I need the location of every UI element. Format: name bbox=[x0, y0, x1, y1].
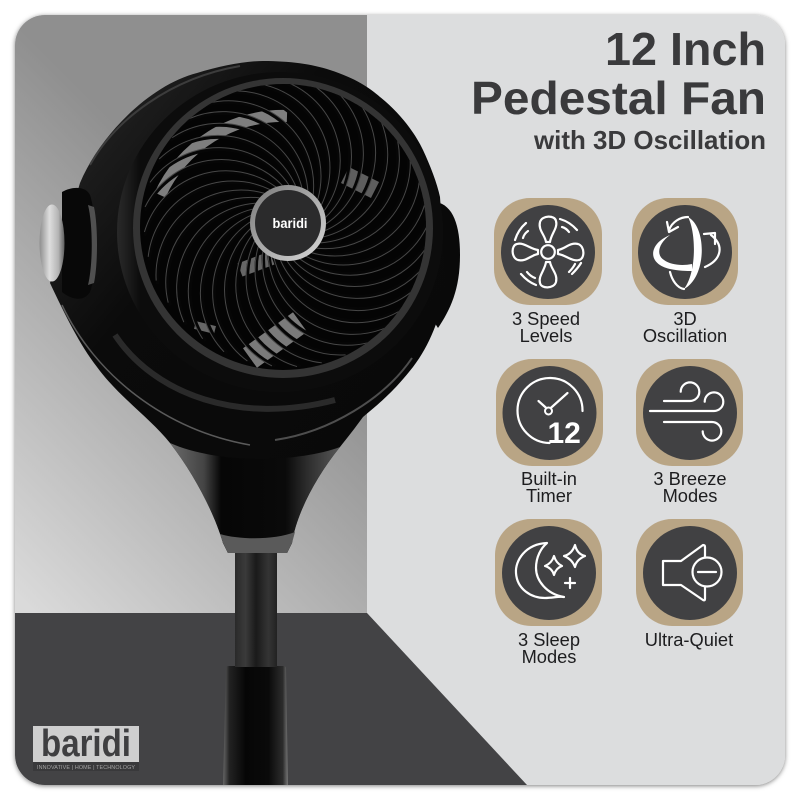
blade glimpses bbox=[160, 116, 375, 358]
fan lower pole bbox=[223, 666, 288, 785]
logo tagline bbox=[33, 762, 139, 771]
badge bbox=[495, 519, 602, 626]
icon: moon and stars bbox=[516, 543, 585, 598]
label: Built-in bbox=[521, 468, 577, 489]
grille spokes highlight bbox=[144, 84, 426, 367]
fan left collar bbox=[62, 188, 95, 299]
grille outer ring bbox=[133, 78, 433, 378]
feature: Ultra-Quiet bbox=[636, 519, 743, 650]
neck grey band bbox=[220, 532, 295, 553]
label: 3 Speed bbox=[512, 308, 580, 329]
label: Timer bbox=[526, 485, 572, 506]
fan silver knob bbox=[40, 204, 64, 282]
title bbox=[471, 23, 766, 155]
badge bbox=[494, 198, 602, 305]
title: 12 Inch bbox=[605, 23, 766, 75]
logo: baridi: baridi bbox=[41, 723, 131, 765]
feature: 3D Oscillation bbox=[632, 198, 738, 346]
label: 3 Sleep bbox=[518, 629, 580, 650]
label: Modes bbox=[663, 485, 717, 506]
icon: 3D rotation bbox=[653, 217, 720, 289]
feature: 3 Breeze Modes bbox=[636, 359, 743, 506]
label: Modes bbox=[522, 646, 576, 667]
wall gradient bbox=[15, 15, 367, 613]
label: Levels bbox=[520, 325, 572, 346]
feature: Built-in Timer bbox=[496, 359, 603, 506]
icon: wind bbox=[650, 382, 723, 441]
icon: fan bbox=[513, 217, 583, 287]
label: Oscillation bbox=[643, 325, 727, 346]
hub brand: baridi bbox=[272, 215, 308, 231]
fan body silhouette bbox=[50, 61, 446, 553]
illustration: pedestal fan bbox=[40, 61, 460, 785]
badge bbox=[496, 359, 603, 466]
fan grille and blades bbox=[144, 84, 426, 368]
label: Ultra-Quiet bbox=[645, 629, 733, 650]
floor bbox=[15, 613, 527, 785]
icon: quiet speaker bbox=[663, 545, 722, 600]
body gloss lines bbox=[62, 66, 412, 445]
title: Pedestal Fan bbox=[471, 72, 766, 124]
grille spokes dark bbox=[154, 85, 425, 362]
fan hub bbox=[250, 185, 326, 261]
icon: clock: 12 bbox=[548, 417, 581, 450]
title: with 3D Oscillation bbox=[533, 125, 766, 155]
fan upper pole bbox=[235, 552, 277, 667]
badge bbox=[632, 198, 738, 305]
collar highlight bbox=[88, 205, 97, 285]
logo: baridi: INNOVATIVE | HOME | TECHNOLOGY bbox=[37, 765, 135, 771]
icon: clock bbox=[518, 378, 583, 450]
badge bbox=[636, 359, 743, 466]
panel: photo backdrop bbox=[15, 15, 527, 785]
collar satin band bbox=[117, 80, 440, 303]
feature: 3 Speed Levels bbox=[494, 198, 602, 346]
fan right arm bbox=[436, 203, 460, 328]
feature: 3 Sleep Modes bbox=[495, 519, 602, 667]
badge bbox=[636, 519, 743, 626]
label: 3 Breeze bbox=[653, 468, 727, 489]
grille opening bbox=[140, 84, 426, 370]
fan neck bbox=[170, 443, 340, 553]
label: 3D bbox=[673, 308, 697, 329]
